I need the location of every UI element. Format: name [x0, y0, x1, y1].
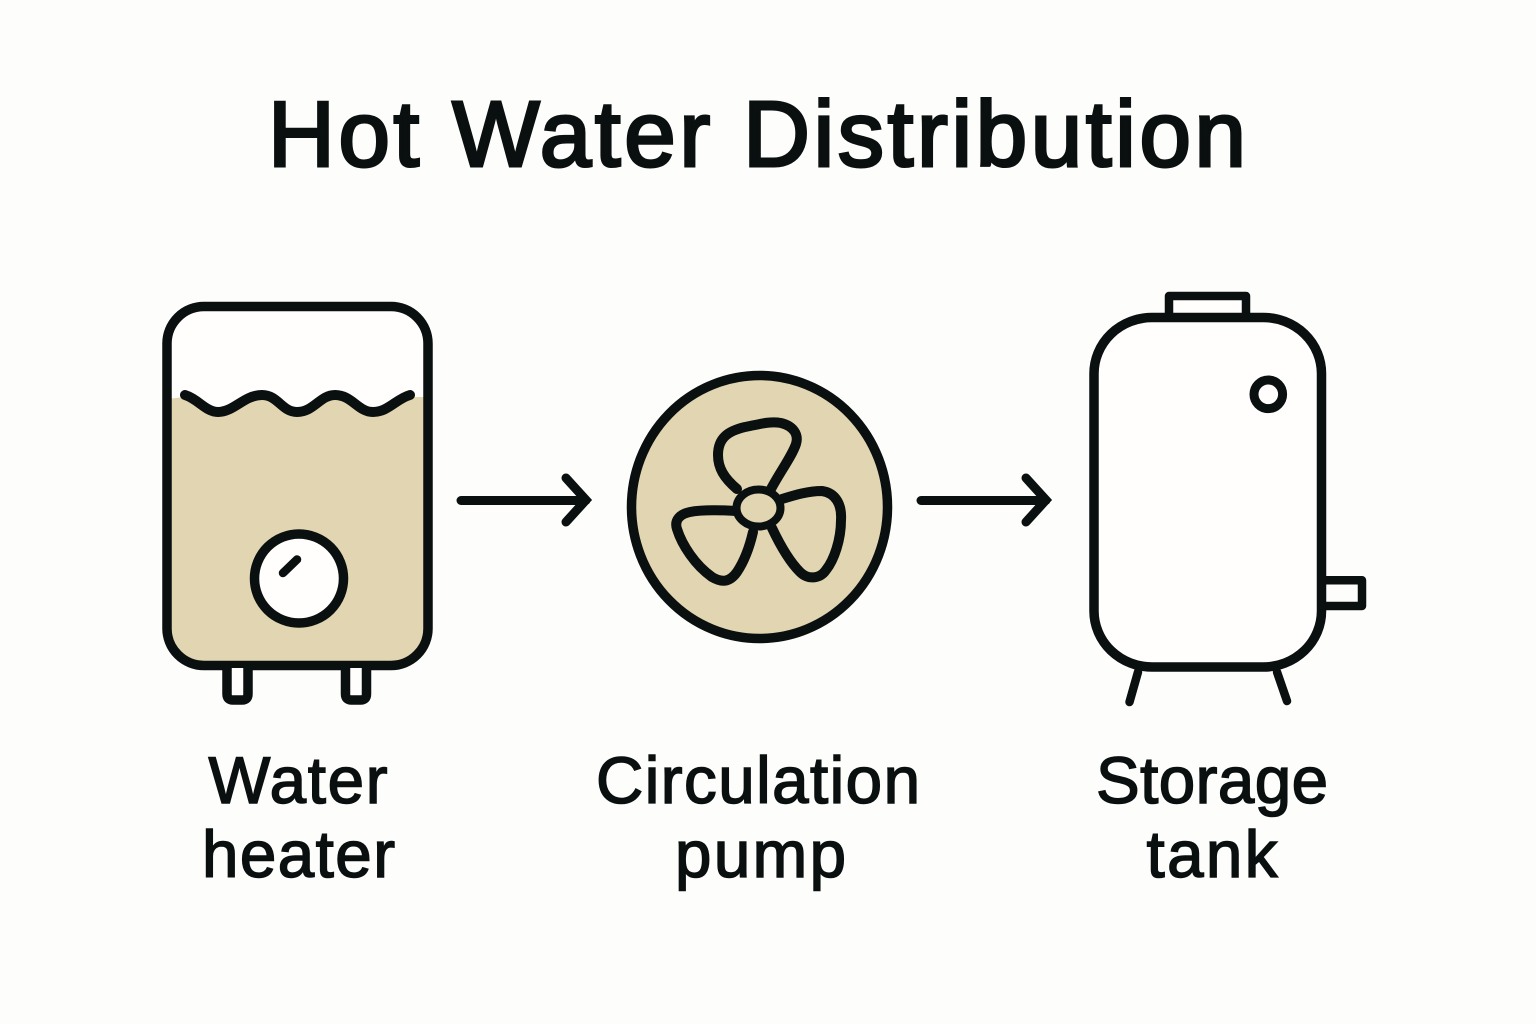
water fill	[167, 395, 428, 665]
icon: circulation pump	[632, 376, 888, 638]
icon: water heater	[167, 306, 428, 700]
right leg	[346, 668, 366, 700]
label: water heater: heater	[202, 818, 395, 891]
label: storage tank	[1096, 744, 1328, 891]
icon: storage tank	[1094, 296, 1362, 702]
label: water heater: Water	[208, 744, 388, 817]
tank body	[1094, 318, 1322, 667]
label: circulation pump: pump	[675, 818, 846, 891]
label: storage tank: Storage	[1096, 744, 1328, 817]
label: circulation pump: Circulation	[596, 744, 920, 817]
right leg	[1277, 672, 1287, 701]
side outlet	[1324, 580, 1362, 606]
water surface	[185, 395, 410, 412]
gauge	[1254, 380, 1283, 409]
fan hub	[736, 490, 780, 526]
label: storage tank: tank	[1146, 818, 1278, 891]
dial	[254, 534, 344, 623]
heater body	[167, 306, 428, 666]
label: circulation pump	[596, 744, 920, 891]
fan blades	[676, 422, 841, 581]
top cap	[1169, 296, 1246, 316]
arrow: pump to tank	[921, 478, 1046, 522]
pump housing	[632, 376, 888, 638]
left leg	[1130, 672, 1138, 702]
arrow: heater to pump	[461, 478, 586, 522]
heater interior	[167, 306, 428, 666]
left leg	[227, 668, 248, 700]
title: Hot Water Distribution	[268, 82, 1246, 186]
label: water heater	[202, 744, 395, 891]
